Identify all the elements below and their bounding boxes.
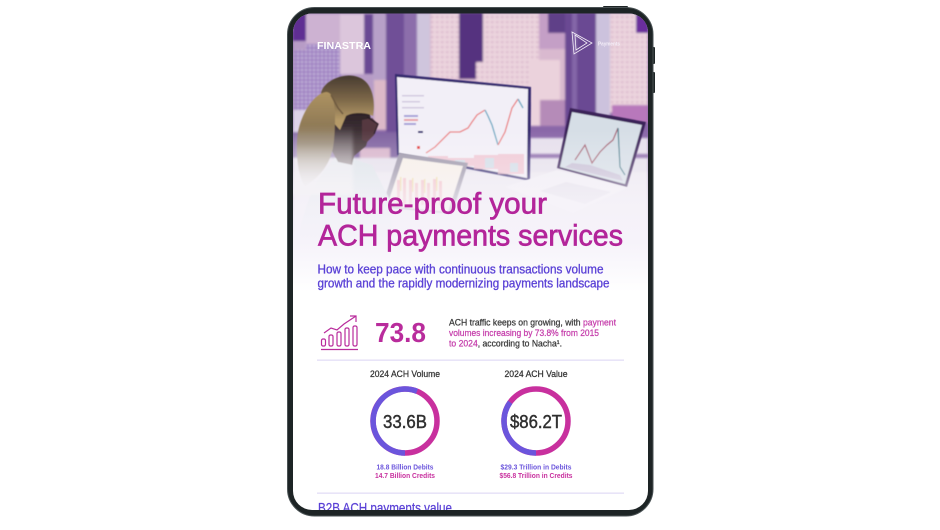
title: Future-proof your	[318, 188, 547, 220]
subtitle: How to keep pace with continuous transactions volume	[318, 262, 604, 276]
tablet frame	[288, 8, 653, 516]
screen background	[293, 13, 648, 510]
icon: play mark	[572, 32, 592, 54]
infographic tablet mockup	[287, 6, 655, 516]
legend: value: $56.8 Trillion in Credits	[500, 471, 572, 480]
stat description: volumes increasing by 73.8% from 2015	[449, 328, 599, 338]
screen	[293, 13, 648, 516]
laptop	[524, 108, 646, 188]
payments logo: Payments	[598, 42, 620, 48]
heading: volume: 2024 ACH Volume	[370, 369, 440, 379]
payments logo	[572, 32, 620, 54]
photo fade to white	[293, 130, 648, 292]
value: $86.2T: $86.2T	[510, 412, 562, 432]
tablet side buttons	[603, 6, 655, 93]
icon: growth chart	[321, 316, 358, 350]
legend: volume: 14.7 Billion Credits	[375, 471, 435, 480]
stat description	[449, 318, 616, 348]
hero photo	[293, 14, 648, 236]
panel: 2024 ACH volume	[370, 369, 440, 480]
title	[318, 188, 623, 252]
Finastra logo: FINASTRA	[317, 41, 372, 52]
legend: volume: 18.8 Billion Debits	[376, 462, 434, 472]
donut: volume	[373, 389, 437, 453]
legend: value	[500, 464, 572, 479]
stat: 73.8: 73.8	[375, 317, 426, 348]
value: 33.6B: 33.6B	[383, 412, 427, 432]
subtitle: growth and the rapidly modernizing payments landscape	[318, 276, 610, 290]
stat description: ACH traffic keeps on growing, with payment	[449, 318, 616, 328]
panel: 2024 ACH value	[500, 369, 572, 480]
heading: value: 2024 ACH Value	[504, 369, 568, 379]
heading: B2B ACH payments value: B2B ACH payments value	[318, 500, 452, 516]
stat description: to 2024, according to Nacha¹.	[449, 338, 562, 348]
legend: volume	[375, 464, 435, 478]
tablet in photo	[382, 153, 468, 214]
title: ACH payments services	[318, 220, 623, 252]
subtitle	[318, 262, 610, 290]
woman	[296, 74, 389, 208]
monitor	[395, 74, 531, 181]
legend: value: $29.3 Trillion in Debits	[500, 462, 572, 472]
donut: value	[504, 389, 568, 453]
